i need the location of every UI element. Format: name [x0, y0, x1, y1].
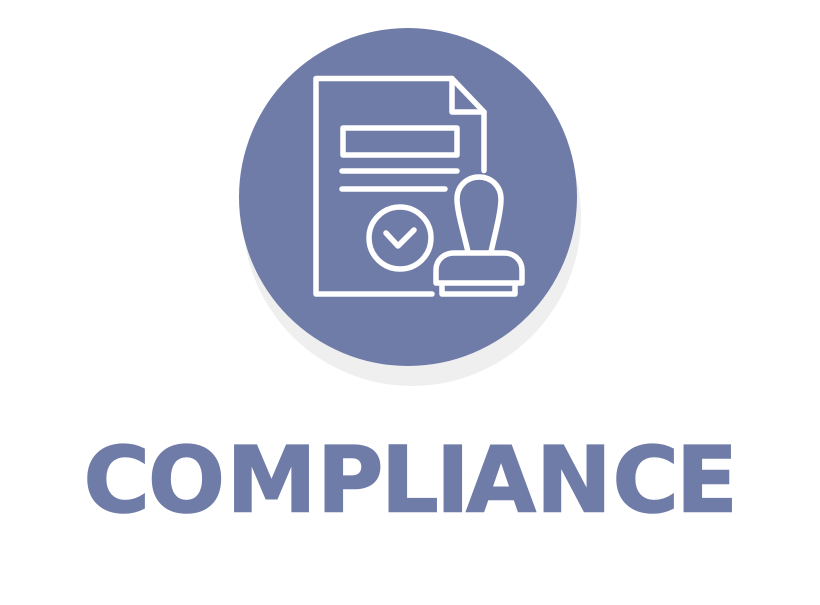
document text lines: [342, 171, 457, 189]
folded corner: [452, 78, 484, 112]
check badge: [369, 207, 431, 269]
stamp: [436, 177, 522, 294]
document title box: [343, 128, 457, 155]
icon: document with stamp: [316, 78, 522, 294]
title: COMPLIANCE: [84, 428, 738, 534]
badge circle: [239, 28, 577, 366]
document outline: [316, 78, 484, 294]
badge circle shadow: [243, 48, 581, 386]
